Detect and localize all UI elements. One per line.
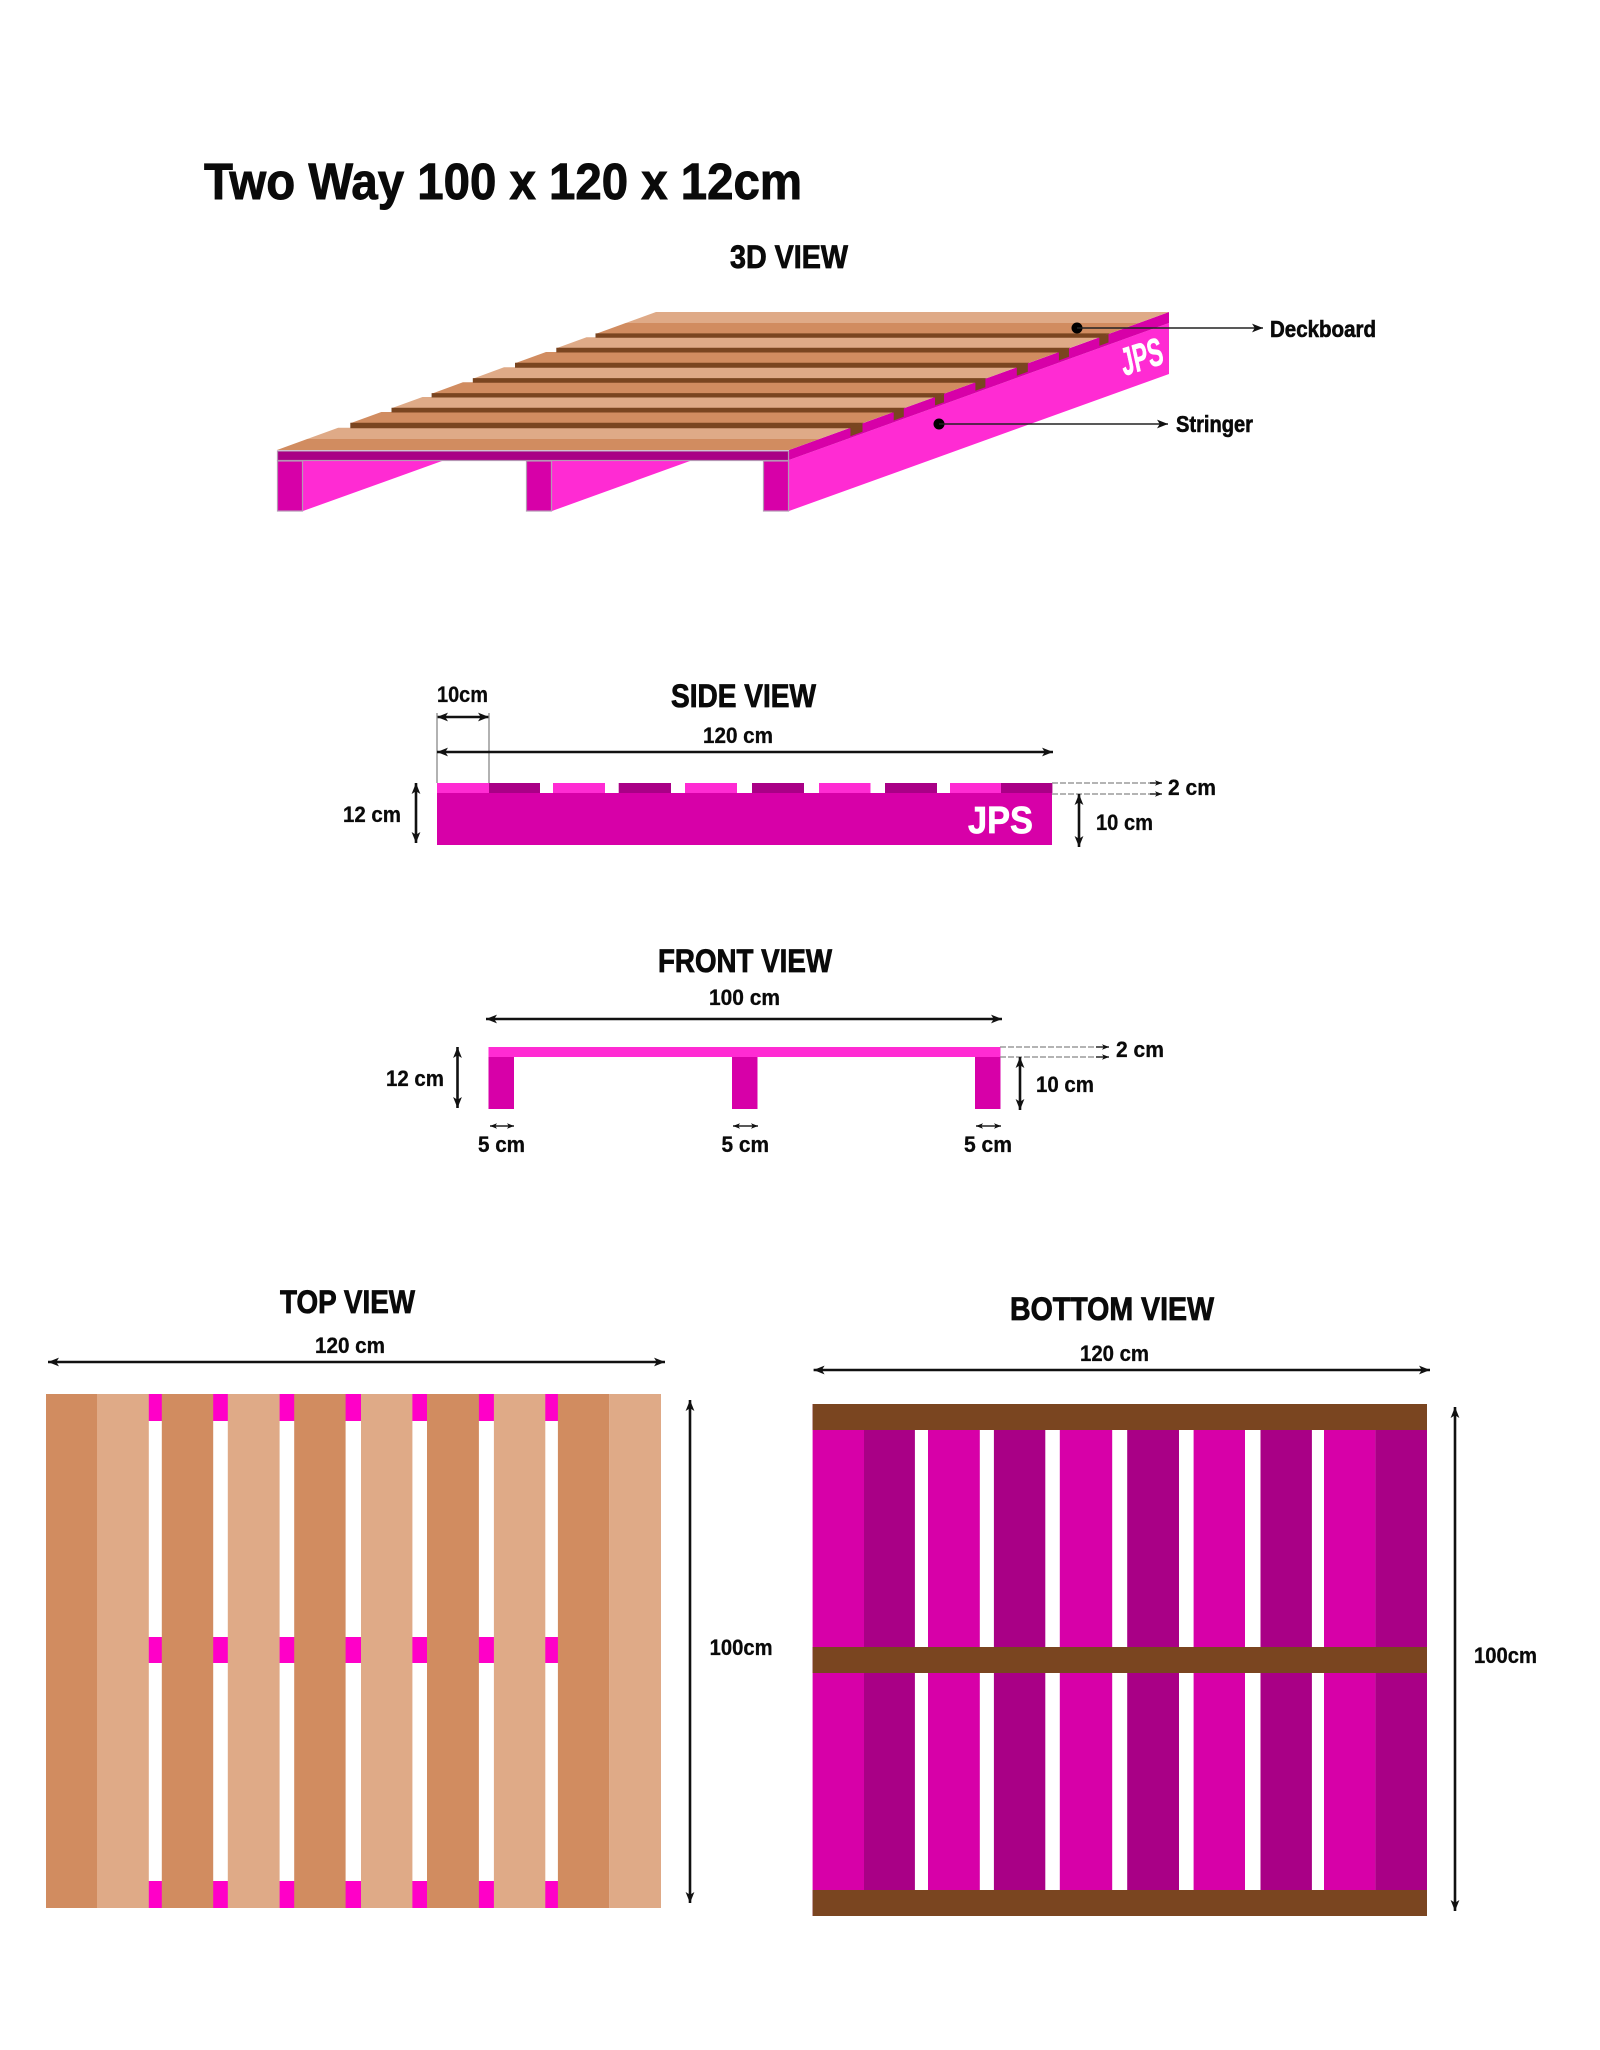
side view diagram: [437, 783, 1052, 845]
heading: front view: FRONT VIEW: [658, 943, 833, 979]
top view diagram: [46, 1394, 661, 1908]
dimension: side 2 cm: 2 cm: [1168, 775, 1216, 800]
dimension: side 120 cm: 120 cm: [703, 723, 773, 748]
dimension: side 12 cm: 12 cm: [343, 802, 401, 827]
dimension: side 10 cm: 10 cm: [1096, 810, 1153, 835]
stringer top strip: [789, 312, 1169, 460]
dimension: front 10 cm: 10 cm: [1036, 1072, 1094, 1097]
heading: bottom view: BOTTOM VIEW: [1010, 1291, 1215, 1327]
bottom view diagram: [813, 1404, 1427, 1916]
side stringer: [437, 793, 1052, 845]
dimension: front 10 cm: [1020, 1057, 1094, 1110]
JPS logo on stringer: JPS: [1117, 329, 1167, 385]
deck gaps across stringer strip: [850, 334, 1108, 436]
3D pallet illustration: [277, 312, 1169, 511]
rear stringers: [303, 461, 690, 511]
front stringer ends: [278, 461, 788, 511]
dimension: front 100 cm: 100 cm: [709, 985, 780, 1010]
bottom deck boards: [813, 1404, 1427, 1916]
dimension: top 100cm: 100cm: [710, 1635, 773, 1660]
front legs: [488, 1057, 1000, 1109]
dimension: bottom 120 cm: 120 cm: [1080, 1341, 1149, 1366]
heading: side view: SIDE VIEW: [671, 678, 817, 714]
front deck board: [278, 451, 788, 460]
dimension: middle leg 5 cm: 5 cm: [722, 1132, 769, 1157]
dimension: left leg 5 cm: 5 cm: [478, 1132, 525, 1157]
deck boards: [277, 312, 1169, 450]
heading: 3D view: 3D VIEW: [730, 239, 849, 275]
dimension: side 10cm board: 10cm: [437, 682, 488, 707]
dimension: top 120 cm: 120 cm: [315, 1333, 385, 1358]
dimension: front 12 cm: 12 cm: [386, 1066, 444, 1091]
heading: top view: TOP VIEW: [280, 1284, 416, 1320]
title: Two Way 100 x 120 x 12cm: [204, 153, 802, 210]
top deck boards: [46, 1394, 661, 1908]
brown stringers: [813, 1404, 1427, 1916]
callout: Stringer: Stringer: [1176, 411, 1253, 437]
right stringer face: [789, 323, 1169, 511]
front view diagram: [488, 1047, 1000, 1109]
callout: Deckboard: Deckboard: [1270, 316, 1376, 342]
dimension: front 2 cm: 2 cm: [1116, 1037, 1164, 1062]
callout: Stringer: [934, 411, 1253, 437]
dimension: right leg 5 cm: 5 cm: [964, 1132, 1012, 1157]
dimension: front 12 cm: [386, 1047, 458, 1108]
front deck board: [488, 1047, 1000, 1057]
dimension: side 12 cm: [343, 783, 416, 843]
callout: Deckboard: [1072, 316, 1376, 342]
dimension: side 10cm board: [437, 682, 489, 783]
dimension: bottom 100cm: 100cm: [1474, 1643, 1537, 1668]
magenta stringers visible in gaps: [148, 1394, 570, 1908]
side deck boards: [437, 783, 1052, 793]
JPS logo: JPS: [968, 800, 1033, 842]
dimension: side 10 cm: [1079, 794, 1153, 847]
